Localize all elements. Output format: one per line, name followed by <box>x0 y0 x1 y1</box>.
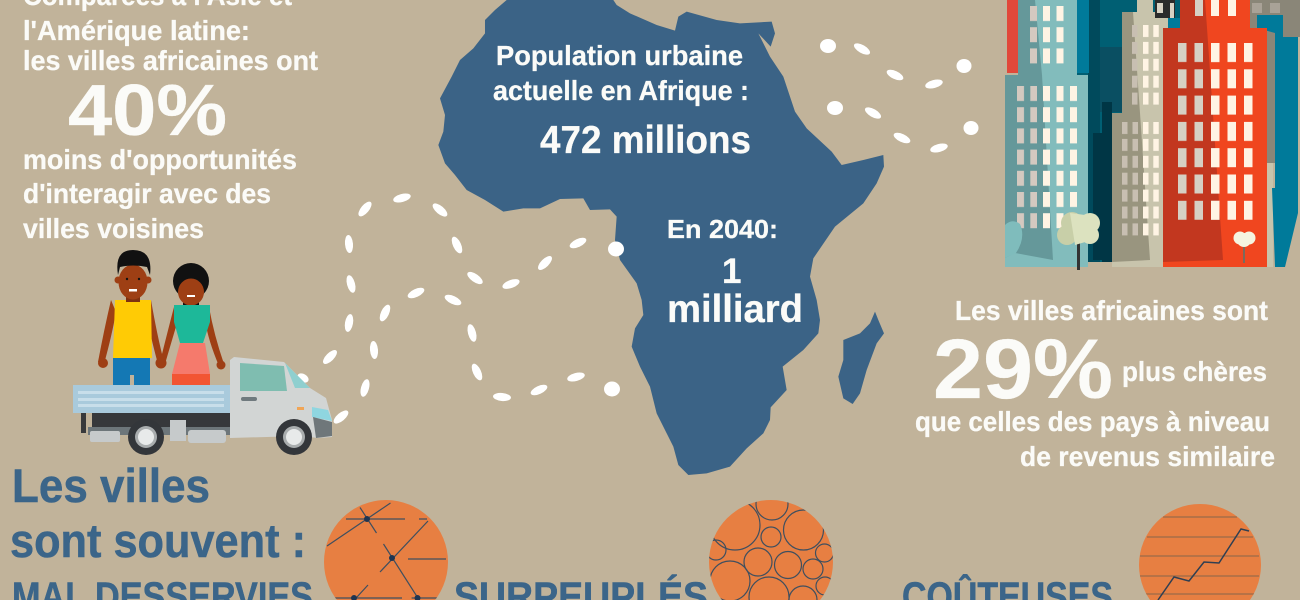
text: 29% more expensive: de revenus similaire <box>1020 441 1275 472</box>
footprint trails <box>296 39 978 426</box>
Madagascar <box>838 312 884 404</box>
text: urban population in Africa: Population urbaine <box>496 40 743 71</box>
icon: rising cost chart <box>1139 504 1261 600</box>
text: 40% fewer opportunities: moins d'opportunités <box>23 144 297 175</box>
heading: les villes sont souvent: sont souvent : <box>10 514 306 567</box>
man <box>98 250 166 385</box>
text: 29% more expensive: plus chères <box>1122 356 1267 387</box>
text: 40% fewer opportunities: villes voisines <box>23 213 204 244</box>
text: 40% fewer opportunities: 40% <box>68 71 227 151</box>
text: 29% more expensive: 29% <box>933 322 1113 416</box>
text: 40% fewer opportunities <box>23 0 318 244</box>
text: urban population in Africa <box>493 40 803 331</box>
text: 40% fewer opportunities: l'Amérique latine: <box>23 15 250 46</box>
text: 29% more expensive: Les villes africaines sont <box>955 295 1268 326</box>
grey building <box>1112 0 1180 267</box>
woman <box>160 263 226 385</box>
text: urban population in Africa: 1 <box>722 252 741 291</box>
text: urban population in Africa: 472 millions <box>540 119 751 162</box>
heading: les villes sont souvent: Les villes <box>12 459 210 512</box>
red building <box>1163 0 1267 267</box>
map of Africa <box>438 0 884 475</box>
truck <box>73 357 332 455</box>
illustration: couple standing in truck <box>73 250 332 455</box>
text: urban population in Africa: actuelle en Afrique : <box>493 75 749 106</box>
text: 40% fewer opportunities: d'interagir avec des <box>23 178 271 209</box>
illustration: city skyline <box>1005 0 1300 270</box>
trees <box>1057 212 1256 270</box>
teal building <box>1005 0 1088 267</box>
text: 40% fewer opportunities: les villes africaines ont <box>23 45 318 76</box>
text: 29% more expensive: que celles des pays à niveau <box>915 406 1270 437</box>
text: urban population in Africa: En 2040: <box>667 214 778 244</box>
icon: packed circles <box>709 500 833 600</box>
icon: network circle <box>324 500 448 600</box>
text: urban population in Africa: milliard <box>667 288 803 331</box>
text: 29% more expensive <box>915 295 1275 472</box>
heading: les villes sont souvent <box>10 459 306 567</box>
